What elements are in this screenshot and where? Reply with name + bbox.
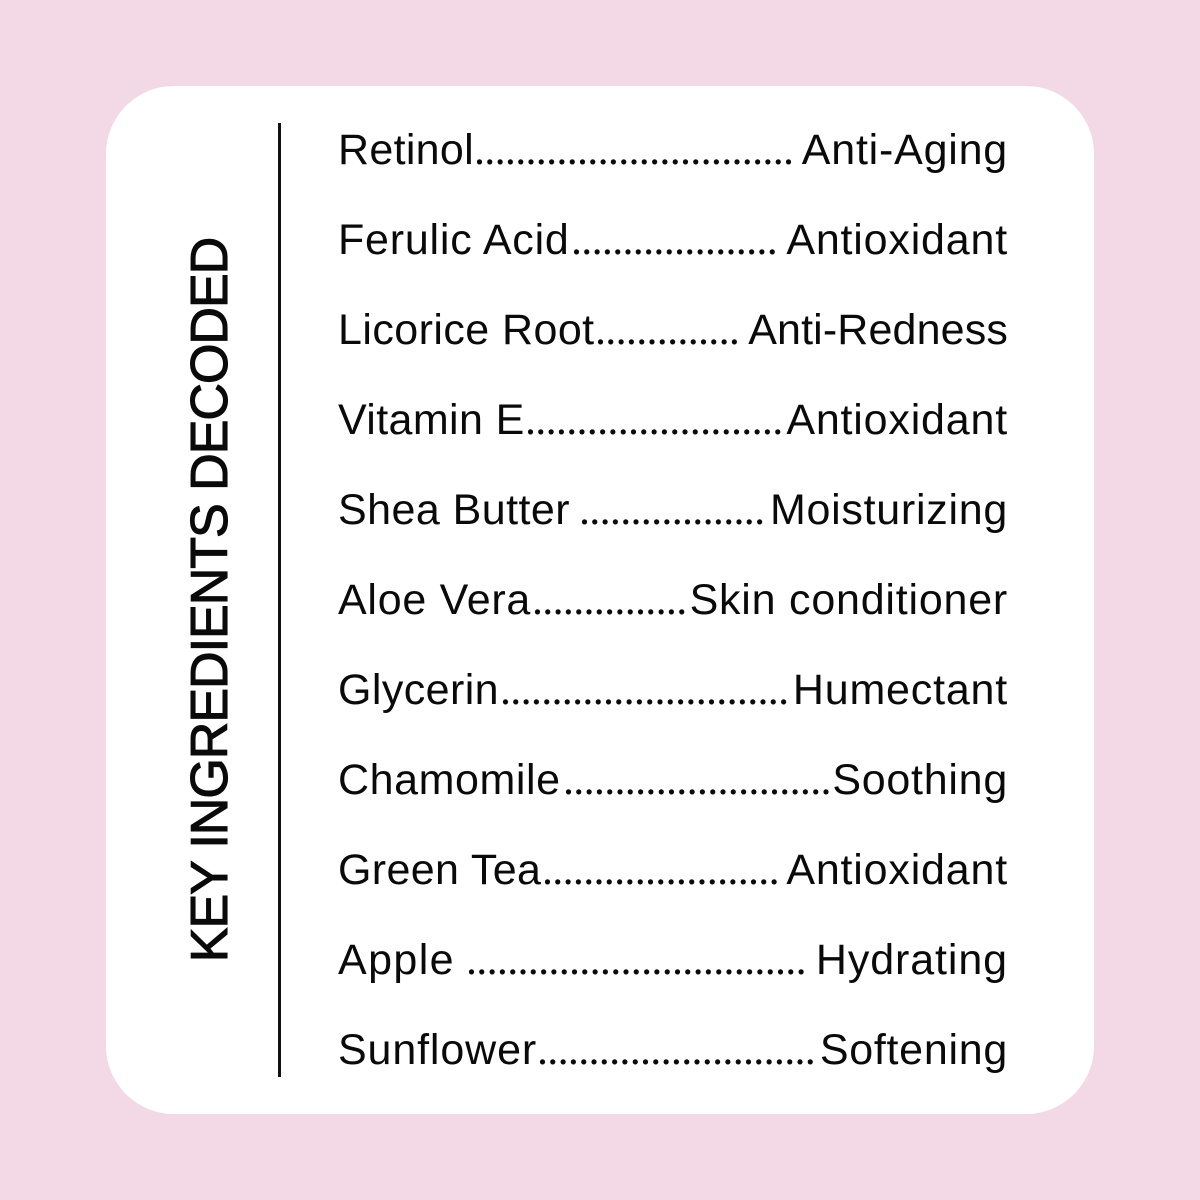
ingredient row: Glycerin: ............................ xyxy=(500,665,788,714)
ingredient row: Sunflower: Softening xyxy=(820,1026,1008,1074)
ingredient row: Licorice Root: Licorice Root xyxy=(338,306,595,354)
ingredient row: Chamomile: Chamomile xyxy=(338,756,561,804)
ingredient row: Green Tea xyxy=(338,845,1008,894)
ingredient row: Vitamin E xyxy=(338,395,1008,444)
ingredient row: Ferulic Acid: Ferulic Acid xyxy=(338,216,570,264)
ingredient row: Sunflower: Sunflower xyxy=(338,1026,537,1074)
ingredient row: Sunflower: ........................... xyxy=(537,1025,815,1074)
panel: white card xyxy=(106,86,1094,1114)
ingredient row: Shea Butter xyxy=(338,485,1008,534)
ingredient row: Retinol: Anti-Aging xyxy=(802,126,1008,174)
ingredient row: Aloe Vera: Aloe Vera xyxy=(338,576,531,624)
title: key ingredients decoded: KEY INGREDIENTS DECODED xyxy=(181,238,239,962)
ingredient row: Green Tea: Green Tea xyxy=(338,846,541,894)
vertical divider line xyxy=(278,123,281,1077)
ingredient row: Chamomile xyxy=(338,755,1008,804)
ingredient row: Sunflower xyxy=(338,1025,1008,1074)
ingredient row: Apple: ................................. xyxy=(466,935,806,984)
ingredient row: Chamomile: .......................... xyxy=(563,755,831,804)
ingredient row: Green Tea: ....................... xyxy=(542,845,779,894)
ingredient row: Shea Butter: .................. xyxy=(579,485,764,534)
ingredient row: Green Tea: Antioxidant xyxy=(786,846,1008,894)
ingredient row: Vitamin E: ......................... xyxy=(525,395,783,444)
ingredient row: Apple: Hydrating xyxy=(816,936,1008,984)
ingredient row: Licorice Root: Anti-Redness xyxy=(748,306,1008,354)
ingredient row: Glycerin: Glycerin xyxy=(338,666,499,714)
ingredient row: Ferulic Acid xyxy=(338,215,1008,264)
ingredient row: Vitamin E: Vitamin E xyxy=(338,396,525,444)
ingredient row: Shea Butter: Shea Butter xyxy=(338,486,570,534)
ingredient row: Glycerin xyxy=(338,665,1008,714)
ingredient row: Ferulic Acid: Antioxidant xyxy=(786,216,1008,264)
ingredient row: Licorice Root xyxy=(338,305,1008,354)
ingredient row: Vitamin E: Antioxidant xyxy=(786,396,1008,444)
ingredient row: Aloe Vera xyxy=(338,575,1008,624)
ingredient row: Retinol xyxy=(338,125,1008,174)
ingredient row: Shea Butter: Moisturizing xyxy=(770,486,1008,534)
ingredient row: Aloe Vera: ............... xyxy=(532,575,687,624)
ingredient row: Apple xyxy=(338,935,1008,984)
ingredient row: Licorice Root: .............. xyxy=(595,305,739,354)
ingredient row: Apple: Apple xyxy=(338,936,455,984)
ingredient row: Aloe Vera: Skin conditioner xyxy=(690,576,1008,624)
ingredient row: Ferulic Acid: .................... xyxy=(571,215,777,264)
ingredient row: Glycerin: Humectant xyxy=(793,666,1008,714)
ingredient row: Chamomile: Soothing xyxy=(832,756,1008,804)
ingredient row: Retinol: Retinol xyxy=(338,126,474,174)
ingredient row: Retinol: ............................... xyxy=(474,125,793,174)
